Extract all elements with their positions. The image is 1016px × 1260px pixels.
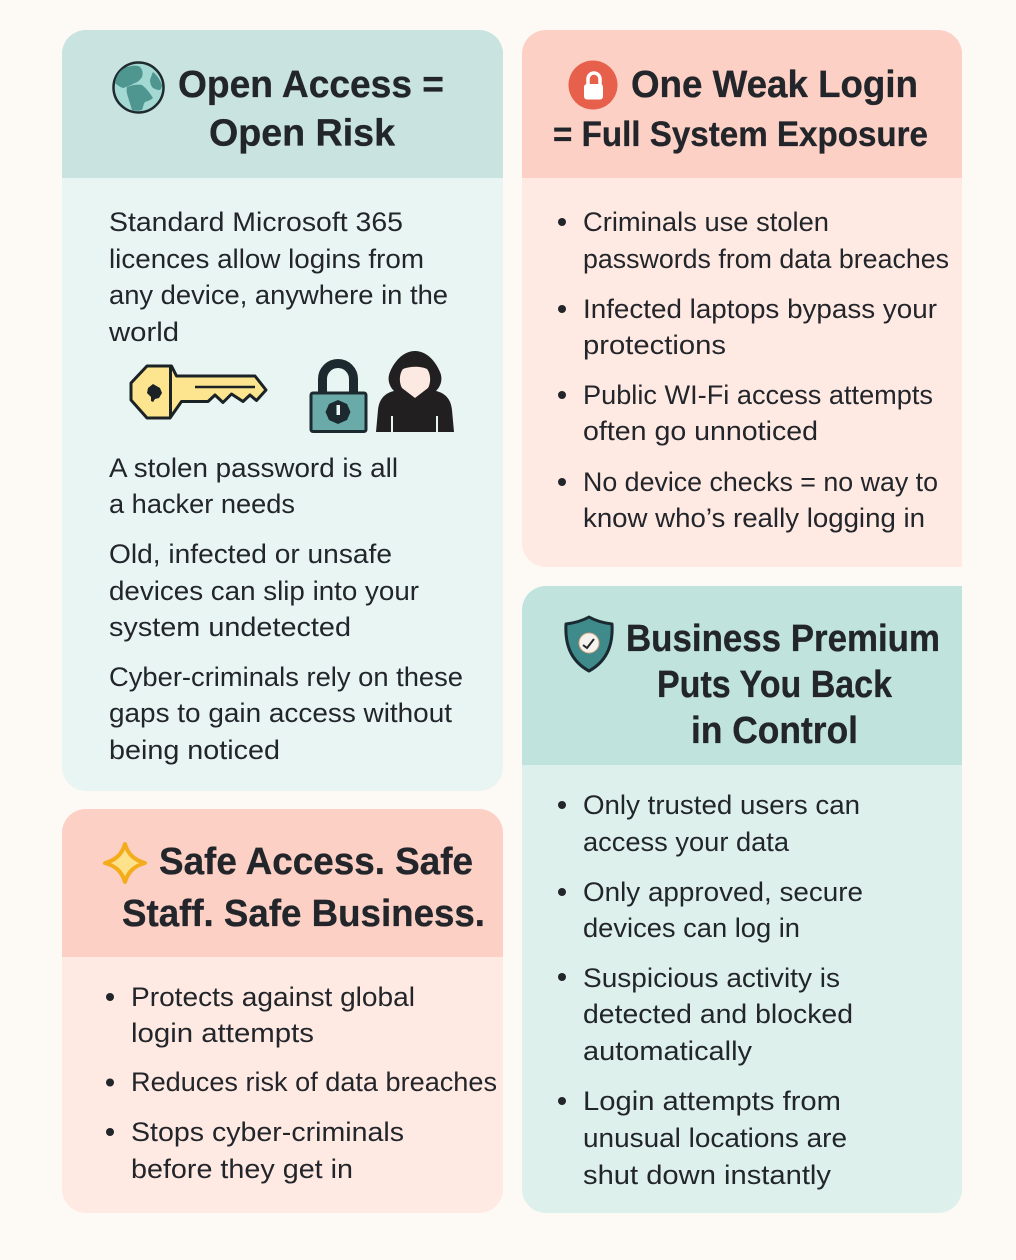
- text block: cyber-criminals: Cyber-criminals rely on these: [109, 662, 463, 692]
- icon: shield: [566, 617, 612, 671]
- bullet list: login threats: Criminals use stolen: [583, 207, 829, 237]
- icon: globe: [114, 62, 164, 112]
- text block: licences: licences allow logins from: [109, 244, 424, 274]
- icon: key: [131, 366, 266, 418]
- text block: unsafe devices: [109, 539, 419, 642]
- bullet list: login threats: often go unnoticed: [583, 416, 818, 446]
- title: business premium: in Control: [691, 710, 858, 752]
- bullet list: login threats: No device checks = no way to: [583, 467, 938, 497]
- title: safe access: Staff. Safe Business.: [122, 893, 485, 935]
- header band: business premium: [522, 586, 962, 765]
- icon: hooded hacker: [376, 351, 454, 432]
- text block: licences: [108, 207, 448, 347]
- bullet list: login threats: know who’s really logging in: [583, 503, 925, 533]
- bullet list: login threats: [558, 207, 949, 533]
- bullet list: benefits: Protects against global: [131, 982, 415, 1012]
- panel: safe access: [62, 809, 503, 1213]
- icon: padlock: [311, 364, 366, 432]
- bullet list: controls: detected and blocked: [583, 999, 853, 1029]
- bullet list: benefits: before they get in: [131, 1154, 353, 1184]
- panel: business premium: [522, 586, 962, 1213]
- text block: licences: any device, anywhere in the: [109, 280, 448, 310]
- bullet list: login threats: Infected laptops bypass your: [583, 294, 937, 324]
- bullet list: controls: [558, 790, 863, 1190]
- title: one weak login: = Full System Exposure: [553, 115, 928, 154]
- title: safe access: Safe Access. Safe: [159, 841, 473, 883]
- bullet list: controls: Suspicious activity is: [583, 963, 840, 993]
- title: one weak login: One Weak Login: [631, 64, 918, 106]
- title: open access: [178, 64, 444, 154]
- bullet list: controls: Only approved, secure: [583, 877, 863, 907]
- panel: open access open risk: [62, 30, 503, 791]
- title: one weak login: [553, 64, 928, 154]
- text block: unsafe devices: Old, infected or unsafe: [109, 539, 392, 569]
- icon: sparkle: [105, 844, 145, 882]
- panel: one weak login: [522, 30, 962, 567]
- text block: stolen password: a hacker needs: [109, 489, 295, 519]
- title: business premium: Business Premium: [626, 618, 940, 660]
- bullet list: controls: Only trusted users can: [583, 790, 860, 820]
- bullet list: benefits: login attempts: [131, 1018, 314, 1048]
- bullet list: controls: access your data: [583, 827, 790, 857]
- title: open access: Open Risk: [209, 112, 396, 154]
- text block: unsafe devices: system undetected: [109, 612, 351, 642]
- text block: stolen password: [109, 453, 398, 519]
- title: open access: Open Access =: [178, 64, 444, 106]
- bullet list: login threats: passwords from data breaches: [583, 244, 949, 274]
- text block: cyber-criminals: [109, 662, 463, 765]
- header band: safe access: [62, 809, 503, 957]
- text block: licences: Standard Microsoft 365: [109, 207, 403, 237]
- bullet list: benefits: Stops cyber-criminals: [131, 1117, 404, 1147]
- header band: one weak login: [522, 30, 962, 178]
- icon: red lock: [568, 60, 618, 110]
- bullet list: controls: automatically: [583, 1036, 753, 1066]
- bullet list: login threats: protections: [583, 330, 726, 360]
- bullet list: benefits: Reduces risk of data breaches: [131, 1067, 497, 1097]
- header band: open access: [62, 30, 503, 178]
- bullet list: controls: Login attempts from: [583, 1086, 841, 1116]
- title: business premium: [626, 618, 940, 752]
- text block: licences: world: [108, 317, 179, 347]
- bullet list: controls: shut down instantly: [583, 1160, 832, 1190]
- title: business premium: Puts You Back: [657, 664, 893, 706]
- bullet list: controls: unusual locations are: [583, 1123, 847, 1153]
- text block: unsafe devices: devices can slip into your: [109, 576, 419, 606]
- title: safe access: [122, 841, 485, 935]
- text block: stolen password: A stolen password is all: [109, 453, 398, 483]
- bullet list: controls: devices can log in: [583, 913, 800, 943]
- bullet list: login threats: Public WI-Fi access attempts: [583, 380, 933, 410]
- bullet list: benefits: [106, 982, 497, 1184]
- text block: cyber-criminals: being noticed: [109, 735, 280, 765]
- text block: cyber-criminals: gaps to gain access without: [109, 698, 453, 728]
